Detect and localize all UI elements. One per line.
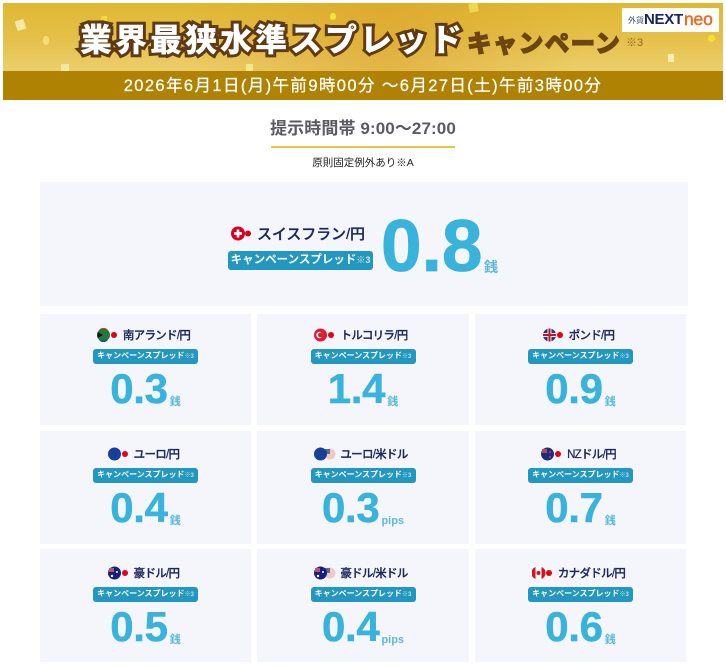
value: 0.8 sen: 0.8 <box>381 206 482 287</box>
value: 銭 <box>605 515 616 527</box>
value: 0.6 <box>545 603 603 650</box>
label <box>541 448 616 461</box>
label <box>108 448 180 461</box>
badge: キャンペーンスプレッド※3 <box>532 351 629 360</box>
value: 銭 <box>170 396 181 408</box>
campaign banner <box>3 3 723 100</box>
value: 1.4 <box>328 365 385 412</box>
label <box>532 566 626 580</box>
value: 銭 <box>387 396 398 408</box>
label: 豪ドル/米ドル <box>340 568 408 580</box>
label: 豪ドル/円 <box>134 568 179 580</box>
value: 銭 <box>605 396 616 408</box>
label <box>108 566 180 580</box>
badge: キャンペーンスプレッド※3 <box>97 351 194 360</box>
panel: GBP/JPY <box>475 314 686 425</box>
value: 0.3 <box>322 484 379 531</box>
badge: キャンペーンスプレッド※3 <box>532 470 629 479</box>
banner title: 業界最狭水準スプレッド <box>80 22 465 58</box>
badge <box>93 349 198 364</box>
campaign period: 2026年6月1日(月)午前9時00分 ～6月27日(土)午前3時00分 <box>124 77 602 95</box>
badge <box>528 349 633 364</box>
badge <box>528 468 633 483</box>
footnote mark: ※3 <box>626 37 643 49</box>
label <box>314 566 408 580</box>
value: 銭 <box>170 634 181 646</box>
value: 銭 <box>605 634 616 646</box>
logo: NEXT neo: neo <box>684 9 713 29</box>
label <box>314 448 408 461</box>
badge: キャンペーンスプレッド※3 <box>97 470 194 479</box>
label: ユーロ/米ドル <box>340 449 408 461</box>
label <box>314 328 408 342</box>
badge: キャンペーンスプレッド※3 <box>315 470 411 479</box>
badge: キャンペーンスプレッド※3 <box>315 589 411 598</box>
value: 0.9 <box>545 365 603 412</box>
logo: NEXT neo: NEXT <box>644 11 683 28</box>
panel: TRY/JPY <box>257 314 469 425</box>
value: 0.7 <box>545 484 603 531</box>
panel: EUR/USD <box>257 431 469 544</box>
badge: キャンペーンスプレッド※3 <box>97 589 194 598</box>
label: カナダドル/円 <box>558 568 625 580</box>
panel: CAD/JPY <box>475 549 686 662</box>
panel: ZAR/JPY <box>40 314 251 425</box>
label <box>97 328 190 342</box>
heading: quote hours: 提示時間帯 9:00～27:00 <box>270 119 456 138</box>
panel: AUD/JPY <box>40 549 251 662</box>
label: ユーロ/円 <box>134 449 179 461</box>
panel: EUR/JPY <box>40 431 251 544</box>
logo: NEXT neo <box>622 8 719 32</box>
label: トルコリラ/円 <box>340 330 408 342</box>
badge: campaign spread: キャンペーンスプレッド※3 <box>231 254 370 266</box>
heading underline <box>271 146 455 148</box>
panel: Swiss franc / yen <box>40 182 688 306</box>
label <box>543 328 614 342</box>
label: CHF/JPY: スイスフラン/円 <box>257 226 365 242</box>
badge: campaign spread <box>228 251 373 270</box>
value: 0.8 sen: 銭 <box>484 259 498 275</box>
label: 南アランド/円 <box>123 330 190 342</box>
badge <box>93 587 198 602</box>
badge <box>93 468 198 483</box>
badge: キャンペーンスプレッド※3 <box>315 351 411 360</box>
logo: NEXT neo: 外貨 <box>628 16 644 25</box>
value: pips <box>381 634 404 646</box>
value: 0.5 <box>110 603 168 650</box>
campaign period <box>3 71 723 100</box>
note: 原則固定例外あり※A <box>312 157 414 169</box>
value: 0.4 <box>322 603 379 650</box>
value: 銭 <box>170 515 181 527</box>
banner subtitle: campaign: キャンペーン <box>467 31 621 58</box>
badge <box>528 587 633 602</box>
value: 0.4 <box>110 484 168 531</box>
badge: キャンペーンスプレッド※3 <box>532 589 629 598</box>
panel: AUD/USD <box>257 549 469 662</box>
value: pips <box>381 515 404 527</box>
value: 0.3 <box>110 365 168 412</box>
panel: NZD/JPY <box>475 431 686 544</box>
badge <box>310 349 416 364</box>
label: ポンド/円 <box>569 330 614 342</box>
badge <box>310 468 416 483</box>
badge <box>310 587 416 602</box>
label: NZドル/円 <box>567 449 616 461</box>
